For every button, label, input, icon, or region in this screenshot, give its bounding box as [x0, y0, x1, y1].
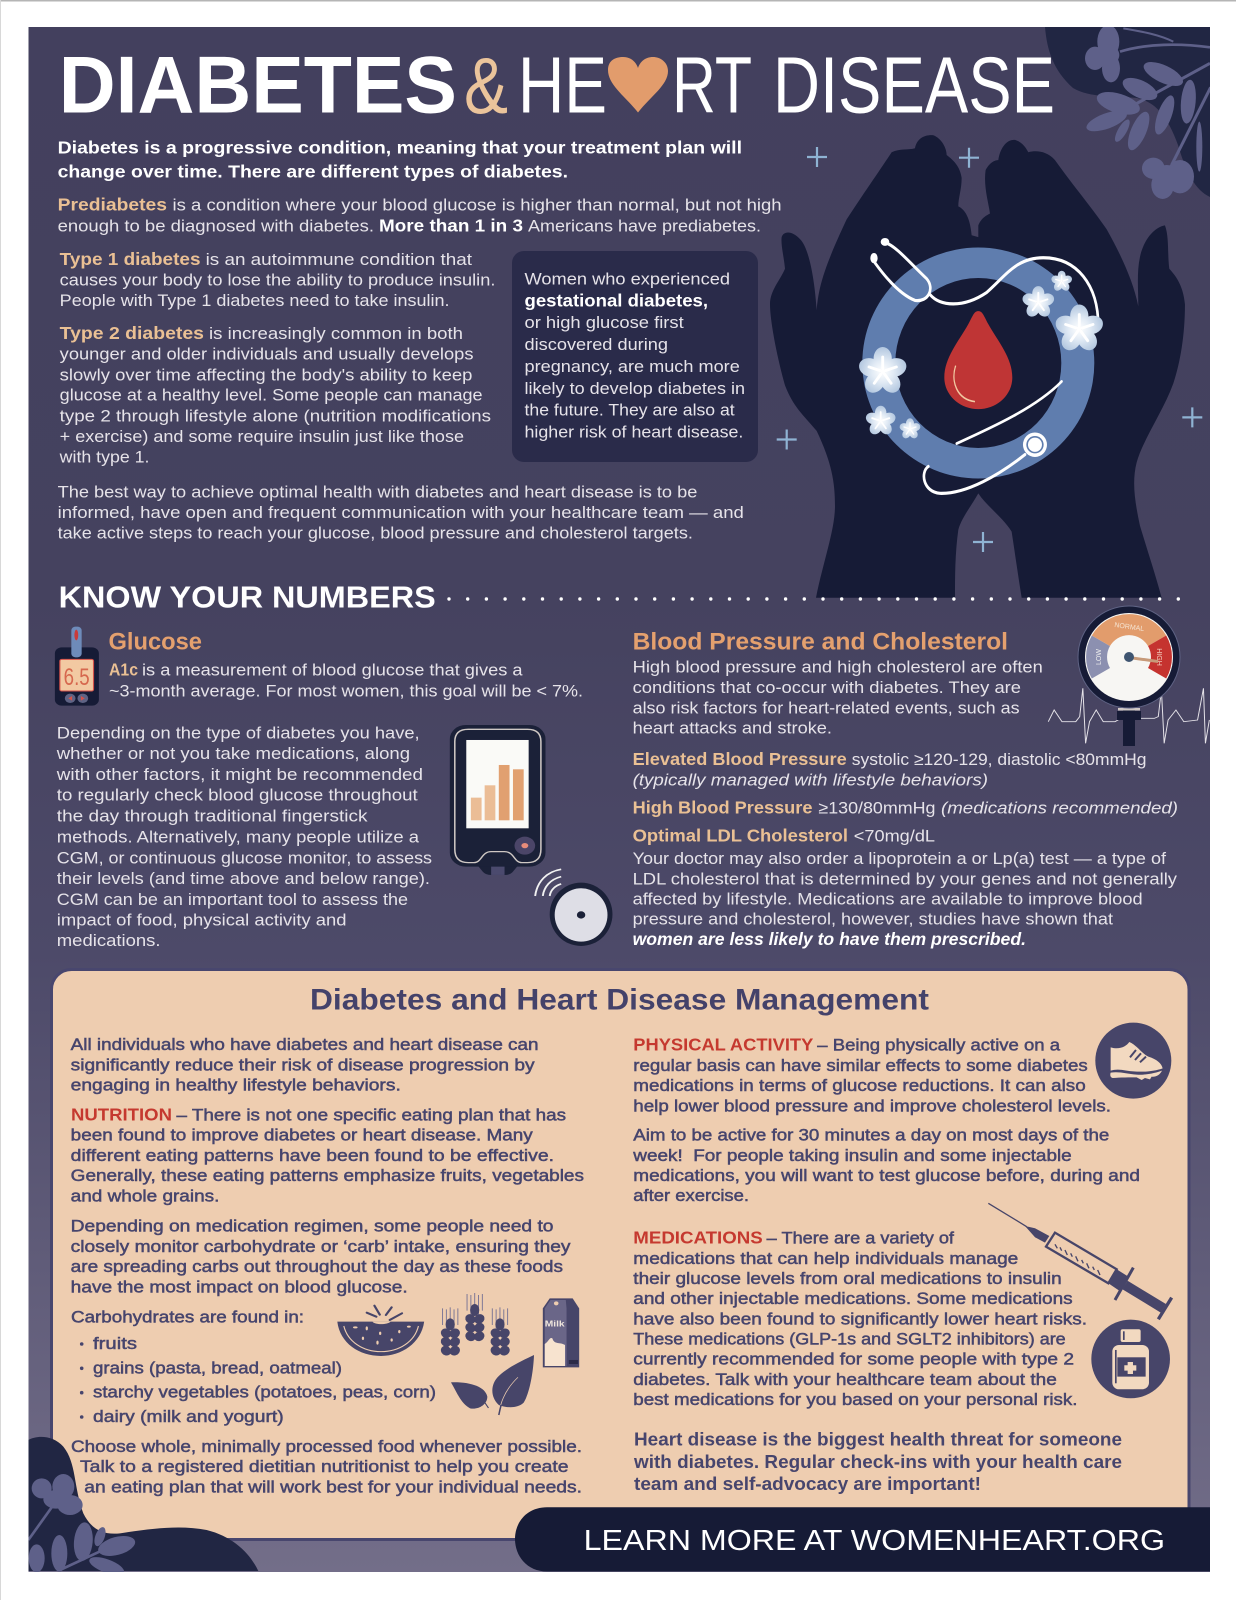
text block: whole food advice: an eating plan that will work best for your individual needs. — [84, 1477, 582, 1496]
list: carbohydrate sources: fruits — [93, 1334, 137, 1353]
text block: glucose: is a measurement of blood glucose that gives a — [142, 661, 523, 680]
text block: blood pressure and cholesterol intro: conditions that co-occur with diabetes. They are — [633, 678, 1021, 697]
icon: blood pressure gauge with ECG line: HIGH — [1155, 648, 1162, 666]
text block: CGM paragraph: the day through traditional fingerstick — [57, 807, 368, 826]
callout: gestational diabetes: higher risk of heart disease. — [524, 422, 743, 442]
text block: blood pressure targets: High Blood Pressure — [633, 797, 813, 817]
text block: medications: diabetes. Talk with your healthcare team about the — [633, 1370, 1057, 1389]
text block: CGM paragraph: their levels (and time above and below range). — [57, 869, 430, 888]
intro statement — [58, 138, 742, 182]
heading: management: Diabetes and Heart Disease Management — [310, 983, 929, 1016]
title: DISEASE — [773, 40, 1055, 130]
icon: leaves — [451, 1355, 534, 1415]
text block: LDL cholesterol: women are less likely to have them prescribed. — [633, 929, 1026, 949]
text block: nutrition — [71, 1105, 584, 1205]
text block: whole food advice: Choose whole, minimally processed food whenever possible. — [71, 1437, 582, 1456]
text block: glucose — [108, 628, 583, 701]
text block: medications: MEDICATIONS — [633, 1227, 763, 1247]
stethoscope — [872, 240, 1098, 493]
text block: type 2 diabetes: with type 1. — [59, 448, 150, 466]
callout: biggest health threat: with diabetes. Regular check-ins with your health care — [633, 1452, 1122, 1472]
list: carbohydrate sources: starchy vegetables (potatoes, peas, corn) — [93, 1383, 436, 1402]
callout: gestational diabetes — [512, 251, 758, 462]
callout: biggest health threat — [633, 1430, 1122, 1494]
text block: management intro: engaging in healthy lifestyle behaviors. — [71, 1075, 401, 1094]
callout: gestational diabetes: pregnancy, are much more — [524, 357, 740, 376]
text block: blood pressure and cholesterol intro — [633, 628, 1043, 737]
text block: blood pressure and cholesterol intro: Blood Pressure and Cholesterol — [633, 628, 1008, 655]
sensor disc — [550, 883, 612, 946]
list: carbohydrate sources — [71, 1308, 436, 1426]
text block: CGM paragraph: methods. Alternatively, many people utilize a — [57, 827, 420, 846]
text block: LDL cholesterol: Your doctor may also order a lipoprotein a or Lp(a) test — a type of — [633, 849, 1166, 868]
hands silhouette — [770, 135, 1185, 598]
text block: CGM paragraph: medications. — [57, 931, 160, 950]
title — [59, 40, 1055, 130]
icon: glucose meter — [55, 627, 99, 706]
text block: medications: medications that can help individuals manage — [633, 1249, 1018, 1268]
title: RT — [672, 40, 752, 130]
text block: LDL cholesterol: pressure and cholesterol, however, studies have shown that — [633, 910, 1113, 929]
sparkle plus signs — [777, 147, 1202, 552]
icon: glucose meter: 6.5 — [64, 665, 90, 691]
text block: type 2 diabetes: Type 2 diabetes — [60, 323, 204, 343]
text block: management intro — [71, 1035, 538, 1094]
text block: medications: have also been found to significantly lower heart risks. — [633, 1309, 1087, 1328]
text block: physical activity: after exercise. — [633, 1186, 749, 1205]
text block: type 2 diabetes — [59, 323, 491, 466]
text block: management intro: All individuals who have diabetes and heart disease can — [71, 1035, 538, 1054]
list: carbohydrate sources: Carbohydrates are found in: — [71, 1308, 304, 1327]
text block: type 2 diabetes: + exercise) and some require insulin just like those — [60, 427, 464, 446]
text block: carbohydrate monitoring: Depending on medication regimen, some people need to — [71, 1217, 553, 1236]
callout: gestational diabetes: the future. They are also at — [524, 401, 735, 420]
text block: type 1 diabetes: Type 1 diabetes — [60, 249, 201, 269]
text block: CGM paragraph: with other factors, it might be recommended — [56, 765, 423, 784]
icon: blood pressure gauge with ECG line: LOW — [1096, 649, 1103, 665]
illustration: hands holding ring, blood drop and stethoscope — [770, 135, 1202, 598]
text block: management intro: significantly reduce their risk of disease progression by — [71, 1055, 535, 1074]
list: carbohydrate sources: grains (pasta, bread, oatmeal) — [93, 1358, 342, 1377]
callout: gestational diabetes: or high glucose first — [524, 313, 684, 332]
ring — [862, 247, 1094, 479]
text block: physical activity: medications in terms of glucose reductions. It can also — [633, 1076, 1086, 1095]
callout: biggest health threat: team and self-advocacy are important! — [634, 1474, 981, 1494]
text block: best way to achieve health: The best way to achieve optimal health with diabetes and heart disease is to be — [58, 482, 697, 502]
icon: blood pressure gauge with ECG line — [1048, 606, 1209, 746]
text block: blood pressure and cholesterol intro: High blood pressure and high cholesterol are often — [633, 658, 1043, 677]
text block: CGM paragraph: Depending on the type of diabetes you have, — [57, 723, 420, 742]
text block: medications — [633, 1227, 1087, 1409]
text block: LDL cholesterol — [633, 826, 1178, 949]
text block: medications: These medications (GLP-1s and SGLT2 inhibitors) are — [633, 1329, 1066, 1348]
text block: medications: – There are a variety of — [767, 1228, 954, 1247]
text block: best way to achieve health: informed, have open and frequent communication with your healthcare team — and — [58, 503, 744, 522]
callout: gestational diabetes: likely to develop diabetes in — [524, 379, 745, 398]
text block: type 1 diabetes — [60, 249, 495, 310]
text block: LDL cholesterol: Optimal LDL Cholesterol — [633, 826, 848, 846]
text block: medications: best medications for you based on your personal risk. — [633, 1390, 1078, 1409]
text block: type 2 diabetes: type 2 through lifestyle alone (nutrition modifications — [60, 406, 491, 425]
text block: best way to achieve health: take active steps to reach your glucose, blood pressure and cholesterol targets. — [58, 524, 693, 543]
text block: type 2 diabetes: is increasingly common in both — [209, 324, 463, 343]
text block: nutrition: and whole grains. — [71, 1186, 219, 1205]
text block: blood pressure targets: (typically managed with lifestyle behaviors) — [633, 771, 988, 790]
text block: carbohydrate monitoring: have the most impact on blood glucose. — [71, 1278, 408, 1297]
text block: CGM paragraph: CGM can be an important tool to assess the — [57, 890, 408, 909]
callout: gestational diabetes: discovered during — [524, 335, 668, 354]
text block: medications: and other injectable medications. Some medications — [633, 1289, 1073, 1308]
text block: glucose: ~3-month average. For most women, this goal will be < 7%. — [109, 682, 583, 701]
callout: biggest health threat: Heart disease is the biggest health threat for someone — [634, 1430, 1122, 1450]
text block: nutrition: been found to improve diabetes or heart disease. Many — [71, 1126, 533, 1145]
text block: prediabetes: Americans have prediabetes. — [528, 216, 761, 235]
icon: running shoe — [1095, 1023, 1171, 1099]
text block: CGM paragraph: impact of food, physical activity and — [57, 911, 347, 930]
text block: physical activity: regular basis can have similar effects to some diabetes — [633, 1056, 1088, 1075]
text block: CGM paragraph: CGM, or continuous glucose monitor, to assess — [57, 848, 432, 867]
text block: carbohydrate monitoring: are spreading carbs out throughout the day as these foods — [71, 1257, 563, 1276]
text block: glucose: Glucose — [108, 628, 202, 655]
text block: blood pressure targets: systolic ≥120-129, diastolic <80mmHg — [852, 750, 1146, 769]
title: & — [464, 41, 508, 130]
text block: physical activity: PHYSICAL ACTIVITY — [633, 1035, 814, 1055]
text block: LDL cholesterol: LDL cholesterol that is determined by your genes and not generally — [633, 869, 1178, 888]
text block: type 1 diabetes: is an autoimmune condition that — [206, 250, 472, 269]
text block: prediabetes: is a condition where your blood glucose is higher than normal, but not high — [172, 196, 782, 215]
text block: blood pressure targets: Elevated Blood Pressure — [633, 749, 847, 769]
text block: prediabetes: Prediabetes — [58, 195, 167, 215]
icon: blood pressure gauge with ECG line: NORMAL — [1114, 622, 1145, 633]
intro statement: Diabetes is a progressive condition, meaning that your treatment plan will — [58, 138, 742, 158]
callout: gestational diabetes: Women who experienced — [524, 270, 730, 289]
blood drop — [944, 311, 1012, 409]
text block: blood pressure targets — [633, 749, 1178, 817]
banner: learn more: LEARN MORE AT WOMENHEART.ORG — [584, 1525, 1165, 1557]
callout: gestational diabetes: gestational diabetes, — [524, 290, 708, 310]
list: carbohydrate sources: dairy (milk and yogurt) — [93, 1407, 284, 1426]
icon: watermelon — [337, 1306, 424, 1356]
text block: physical activity: help lower blood pressure and improve cholesterol levels. — [633, 1096, 1111, 1115]
icon: heart replacing A — [608, 57, 668, 112]
flowers — [857, 271, 1105, 440]
text block: prediabetes — [58, 195, 782, 235]
text block: physical activity — [632, 1035, 1140, 1205]
heading: know your numbers: KNOW YOUR NUMBERS — [59, 580, 436, 615]
icon: milk carton — [543, 1298, 579, 1367]
banner: learn more — [515, 1507, 1210, 1572]
text block: glucose: A1c — [109, 660, 138, 680]
text block: nutrition: – There is not one specific eating plan that has — [176, 1106, 566, 1125]
text block: CGM paragraph: whether or not you take medications, along — [56, 744, 410, 763]
icon: milk carton: Milk — [545, 1319, 565, 1329]
text block: best way to achieve health — [58, 482, 744, 543]
text block: type 2 diabetes: younger and older individuals and usually develops — [60, 345, 473, 364]
text block: prediabetes: enough to be diagnosed with diabetes. — [58, 216, 374, 235]
text block: nutrition: Generally, these eating patterns emphasize fruits, vegetables — [71, 1166, 584, 1185]
text block: type 1 diabetes: People with Type 1 diabetes need to take insulin. — [60, 291, 450, 310]
text block: type 1 diabetes: causes your body to lose the ability to produce insulin. — [60, 271, 495, 290]
text block: nutrition: different eating patterns have been found to be effective. — [71, 1146, 554, 1165]
icon: CGM reader and sensor — [450, 725, 612, 946]
text block: blood pressure targets: (medications recommended) — [941, 798, 1178, 817]
text block: medications: their glucose levels from oral medications to insulin — [633, 1269, 1062, 1288]
icon: wheat — [439, 1293, 512, 1357]
text block: medications: currently recommended for some people with type 2 — [633, 1350, 1074, 1369]
text block: blood pressure and cholesterol intro: heart attacks and stroke. — [633, 718, 832, 737]
text block: blood pressure and cholesterol intro: also risk factors for heart-related events, such as — [633, 698, 1020, 717]
text block: CGM paragraph: to regularly check blood glucose throughout — [57, 786, 418, 805]
text block: physical activity: – Being physically active on a — [817, 1036, 1061, 1055]
reader device — [450, 725, 545, 875]
text block: LDL cholesterol: affected by lifestyle. Medications are available to improve blood — [633, 889, 1143, 908]
text block: prediabetes: More than 1 in 3 — [379, 215, 523, 235]
decorative foliage: top right — [1045, 25, 1211, 199]
text block: whole food advice: Talk to a registered dietitian nutritionist to help you create — [80, 1457, 568, 1476]
text block: physical activity: medications, you will want to test glucose before, during and — [633, 1166, 1140, 1185]
text block: CGM paragraph — [56, 723, 432, 950]
text block: carbohydrate monitoring — [71, 1217, 571, 1297]
text block: carbohydrate monitoring: closely monitor carbohydrate or ‘carb’ intake, ensuring they — [71, 1237, 571, 1256]
icon: medicine bottle — [1091, 1320, 1170, 1398]
text block: type 2 diabetes: slowly over time affecting the body's ability to keep — [60, 365, 472, 384]
text block: type 2 diabetes: glucose at a healthy level. Some people can manage — [60, 386, 483, 405]
text block: LDL cholesterol: <70mg/dL — [854, 827, 935, 846]
icons: food — [337, 1293, 579, 1415]
title: DIABETES — [59, 40, 457, 130]
text block: physical activity: week! For people taking insulin and some injectable — [632, 1146, 1072, 1165]
text block: blood pressure targets: ≥130/80mmHg — [818, 798, 936, 817]
decorative foliage: bottom left — [28, 1437, 258, 1579]
icon: syringe — [988, 1203, 1172, 1319]
text block: nutrition: NUTRITION — [71, 1105, 172, 1125]
title: HE — [518, 40, 607, 130]
text block: whole food advice — [71, 1437, 582, 1496]
text block: physical activity: Aim to be active for 30 minutes a day on most days of the — [633, 1126, 1109, 1145]
intro statement: change over time. There are different types of diabetes. — [58, 162, 568, 182]
wireless signal — [535, 869, 561, 896]
